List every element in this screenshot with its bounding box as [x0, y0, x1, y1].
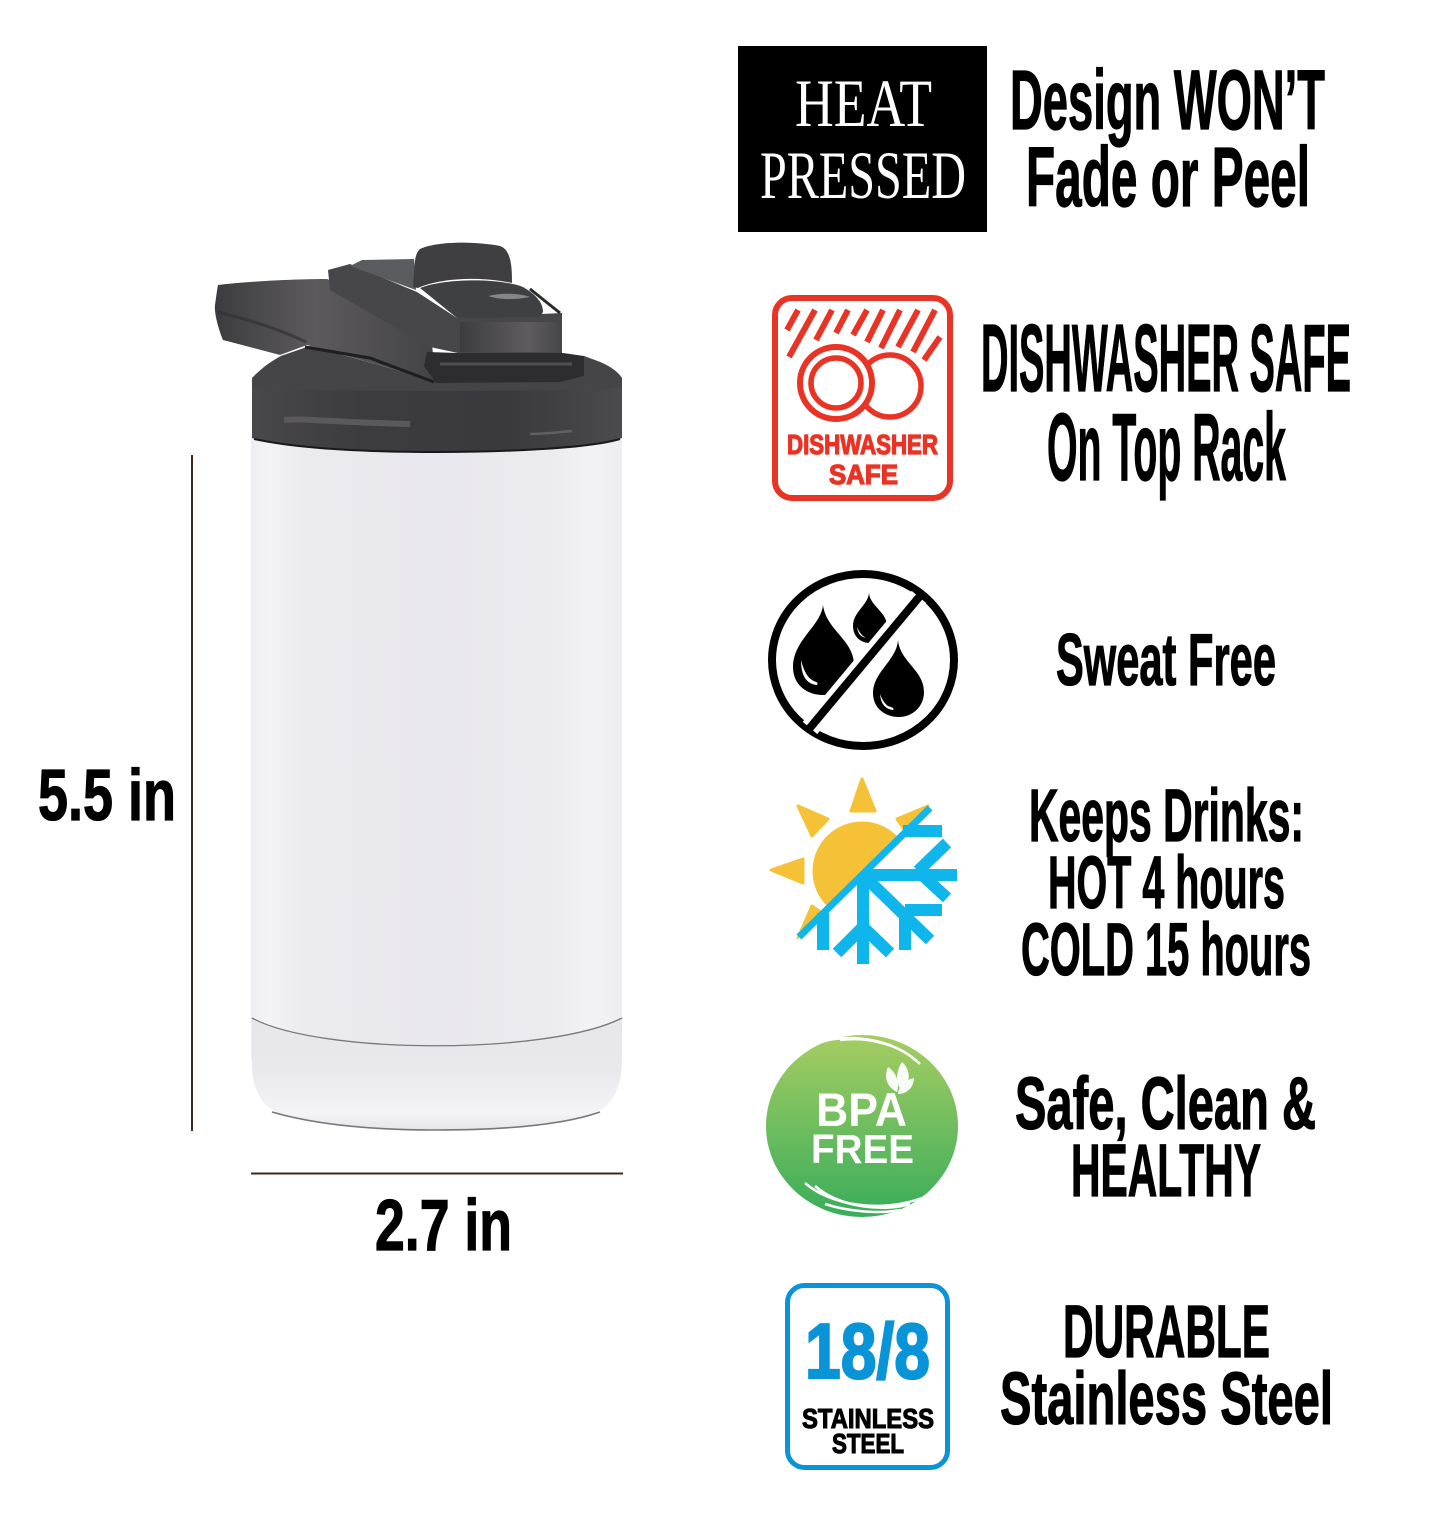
heading: sweat free: Sweat Free [1056, 620, 1276, 701]
dome highlight [488, 294, 530, 299]
icon: 18/8 stainless steel: STEEL [832, 1428, 904, 1459]
rim shadow edge [254, 439, 620, 452]
icon: no sweat drops [772, 574, 954, 746]
collar step [424, 352, 584, 383]
spout front band [460, 322, 558, 352]
dome [420, 280, 543, 318]
icon: 18/8 stainless steel: 18/8 [805, 1307, 930, 1395]
snowflake half [823, 831, 957, 964]
large drop [793, 605, 854, 695]
icon: bpa free [766, 1035, 958, 1217]
base seam [252, 1018, 622, 1046]
icon: heat pressed badge: HEAT [795, 65, 932, 141]
icon: hot and cold [771, 779, 957, 964]
slash [810, 597, 919, 728]
heading: dishwasher safe [981, 305, 1351, 501]
back plate [859, 355, 921, 417]
lid handle [215, 279, 436, 381]
icon: bpa free: BPA [816, 1083, 907, 1136]
rim sloped top [252, 346, 622, 391]
spout upper panel [350, 259, 416, 290]
medium drop [873, 640, 924, 717]
rim highlight right [530, 431, 572, 434]
small drop [853, 593, 887, 643]
lid rim [252, 346, 622, 452]
dishwasher badge text [787, 429, 938, 490]
width dimension line [251, 1172, 623, 1174]
icon: 18/8 stainless steel [788, 1286, 948, 1468]
plate inner ring [811, 358, 861, 408]
dishwasher badge text: DISHWASHER [787, 429, 938, 460]
icon: dishwasher safe [775, 298, 950, 498]
sun half [771, 779, 928, 938]
flip tab [413, 243, 512, 288]
front plate [800, 347, 872, 419]
heading: safe clean healthy: HEALTHY [1071, 1129, 1261, 1212]
icon: bpa free: FREE [811, 1126, 914, 1172]
water spray lines [787, 310, 940, 360]
bottle base [252, 1018, 622, 1130]
groove under handle [305, 347, 434, 382]
heading: design won't fade [1010, 53, 1325, 224]
icon: 18/8 stainless steel: STAINLESS [802, 1403, 934, 1434]
width label: 2.7 in [375, 1186, 512, 1266]
heading: keeps drinks [1021, 774, 1311, 991]
height dimension line [191, 455, 193, 1131]
icon: heat pressed badge: PRESSED [760, 137, 966, 213]
dome groove [530, 289, 560, 313]
handle lower edge [218, 312, 306, 342]
brush strokes [800, 1038, 925, 1212]
diagonal divider [799, 808, 930, 937]
height label: 5.5 in [38, 756, 176, 836]
lid [215, 243, 622, 452]
dishwasher badge text: SAFE [829, 459, 898, 490]
icon: heat pressed badge [738, 46, 987, 232]
heading: safe clean healthy [1015, 1062, 1316, 1212]
leaves [886, 1062, 914, 1094]
bottle body [251, 436, 622, 1060]
rim highlight left [284, 419, 410, 424]
spout block [328, 264, 562, 353]
base shadow [272, 1112, 600, 1130]
heading: durable stainless steel [1000, 1290, 1333, 1440]
bottle [215, 243, 622, 1130]
heading: durable stainless steel: DURABLE [1063, 1290, 1270, 1373]
collar highlight [440, 362, 572, 366]
